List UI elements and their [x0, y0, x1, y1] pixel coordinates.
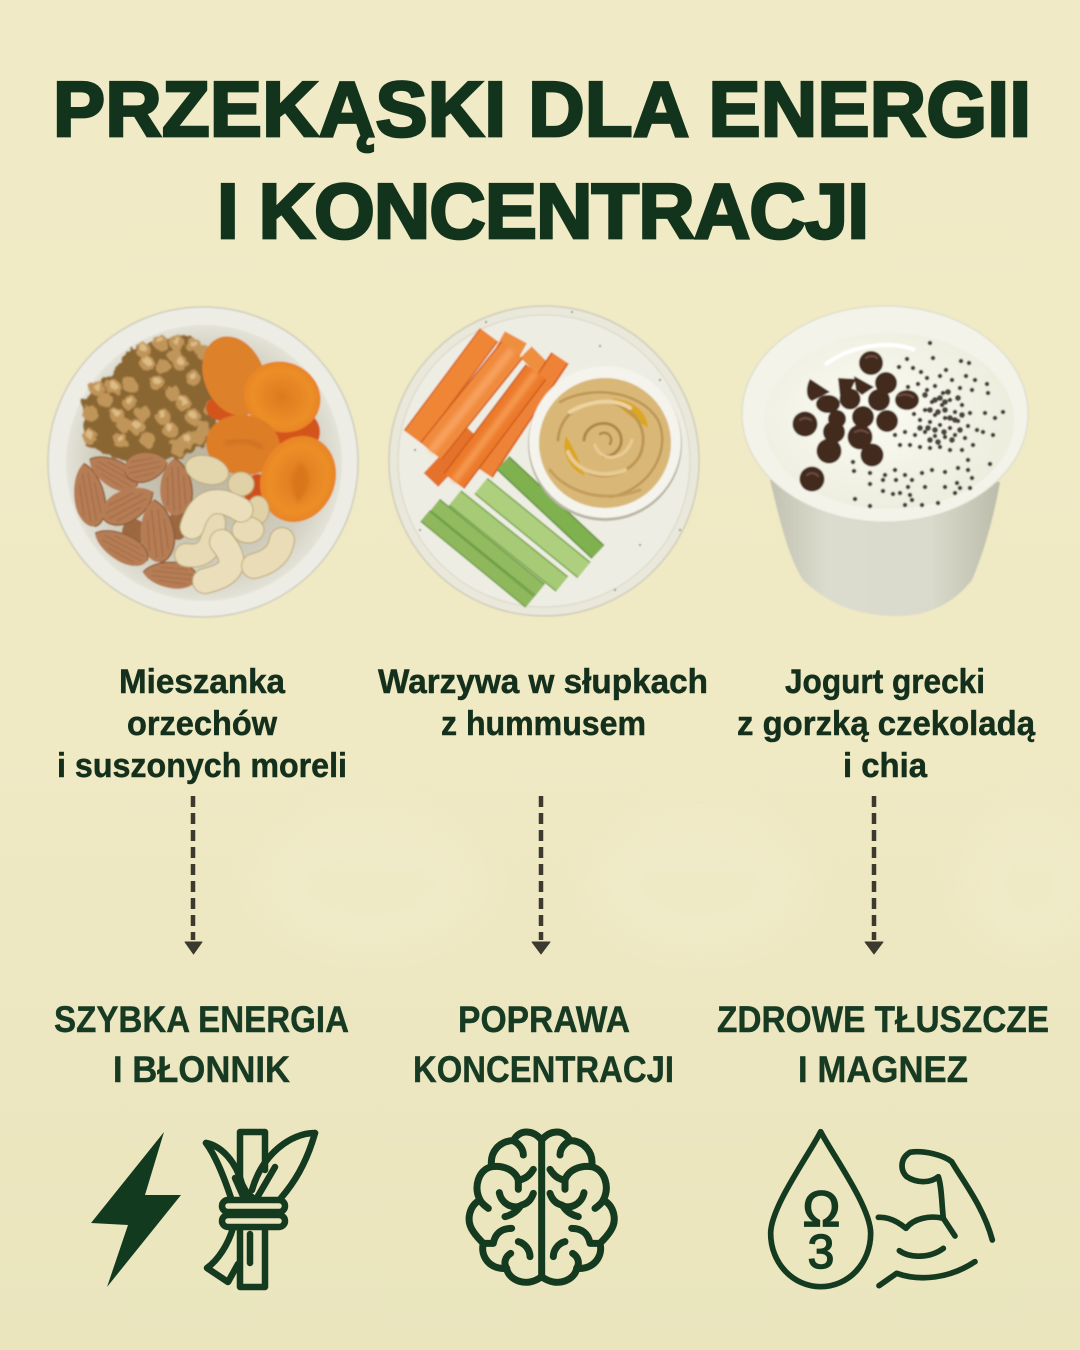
label: vegetables and hummus — [378, 663, 708, 743]
benefit: better concentration — [413, 999, 674, 1090]
cashews — [182, 451, 232, 489]
benefit: healthy fats and magnesium: ZDROWE TŁUSZCZE — [717, 999, 1049, 1040]
label: greek yogurt: Jogurt grecki — [785, 663, 985, 701]
arrow: column 2 — [532, 796, 550, 954]
icon: lightning bolt — [91, 1132, 181, 1287]
almonds — [168, 510, 188, 540]
icon: omega-3 drop — [771, 1132, 871, 1287]
label: nuts and apricots: Mieszanka — [119, 663, 286, 701]
icon: omega-3 drop: 3 — [808, 1226, 834, 1279]
chocolate chips — [792, 351, 919, 492]
photo: bowl of nuts and dried apricots — [48, 307, 358, 617]
benefit: quick energy and fibre: SZYBKA ENERGIA — [54, 999, 349, 1040]
label: greek yogurt: z gorzką czekoladą — [737, 705, 1036, 743]
photo: yogurt cup with chocolate and chia — [742, 306, 1028, 616]
label: vegetables and hummus: z hummusem — [441, 705, 646, 743]
icon: brain — [469, 1132, 614, 1282]
hummus ramekin — [528, 367, 682, 521]
photo: plate with vegetable sticks and hummus — [389, 306, 699, 616]
icon: fibre sheaf — [206, 1132, 315, 1287]
benefit: better concentration: KONCENTRACJI — [413, 1049, 674, 1090]
carrots — [413, 335, 560, 481]
icon: omega-3 drop: Ω — [803, 1181, 840, 1237]
benefit: healthy fats and magnesium — [717, 999, 1049, 1090]
benefit: better concentration: POPRAWA — [458, 999, 630, 1040]
speckles — [415, 312, 680, 590]
benefit: quick energy and fibre: I BŁONNIK — [113, 1049, 290, 1090]
title: I KONCENTRACJI — [217, 167, 869, 255]
walnuts — [82, 335, 218, 460]
title: PRZEKĄSKI DLA ENERGII — [53, 65, 1031, 153]
apricots — [260, 407, 320, 457]
celery — [425, 463, 598, 602]
label: vegetables and hummus: Warzywa w słupkach — [378, 663, 708, 701]
label: greek yogurt — [737, 663, 1036, 785]
title — [53, 65, 1031, 255]
label: greek yogurt: i chia — [843, 747, 928, 785]
benefit: quick energy and fibre — [54, 999, 349, 1090]
benefit: healthy fats and magnesium: I MAGNEZ — [798, 1049, 968, 1090]
label: nuts and apricots: i suszonych moreli — [57, 747, 347, 785]
label: nuts and apricots: orzechów — [127, 705, 278, 743]
icon: flexed arm — [878, 1152, 992, 1286]
label: nuts and apricots — [57, 663, 347, 785]
arrow: column 1 — [185, 796, 202, 954]
arrow: column 3 — [865, 796, 883, 954]
chia seeds — [853, 343, 1003, 506]
